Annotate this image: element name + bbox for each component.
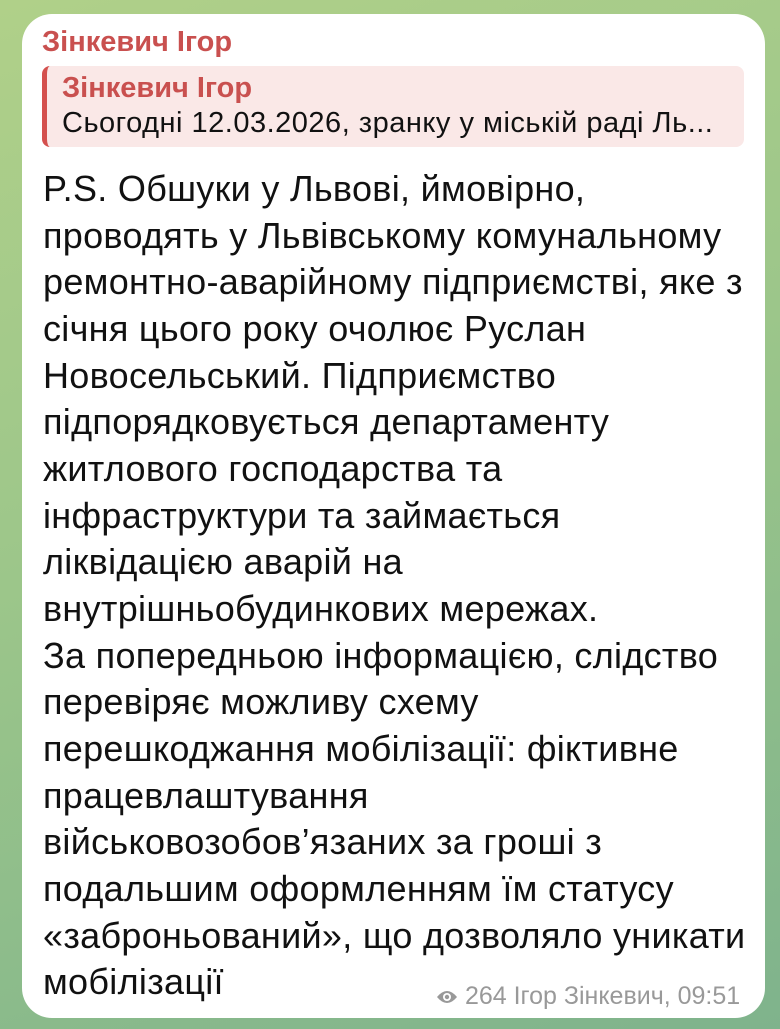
message body text: проводять у Львівському комунальному xyxy=(43,215,721,256)
message body text xyxy=(43,168,745,1002)
message body text: подальшим оформленням їм статусу xyxy=(43,868,674,909)
message body text: житлового господарства та xyxy=(43,448,502,489)
quoted reply xyxy=(42,66,744,147)
message body text: січня цього року очолює Руслан xyxy=(43,308,586,349)
message body text: мобілізації xyxy=(43,961,224,1002)
sender name: Зінкевич Ігор xyxy=(42,26,232,58)
message body text: «заброньований», що дозволяло уникати xyxy=(43,914,745,956)
message body text: перевіряє можливу схему xyxy=(43,681,479,722)
message body text: підпорядковується департаменту xyxy=(43,401,609,442)
message body text: ремонтно-аварійному підприємстві, яке з xyxy=(43,261,743,302)
message body text: За попередньою інформацією, слідство xyxy=(43,635,718,676)
message body text: перешкоджання мобілізації: фіктивне xyxy=(43,728,679,769)
message body text: Новосельський. Підприємство xyxy=(43,355,556,396)
message body text: інфраструктури та займається xyxy=(43,495,560,536)
message body text: внутрішньобудинкових мережах. xyxy=(43,588,598,629)
message body text: P.S. Обшуки у Львові, ймовірно, xyxy=(43,168,585,209)
message body text: ліквідацією аварій на xyxy=(43,541,403,582)
quote author: Зінкевич Ігор xyxy=(62,72,252,104)
message body text: працевлаштування xyxy=(43,775,369,816)
meta: views, author, time: 264 Ігор Зінкевич, 09:51 xyxy=(465,982,740,1010)
message body text: військовозобов’язаних за гроші з xyxy=(43,821,602,862)
quote text: Сьогодні 12.03.2026, зранку у міській раді Ль... xyxy=(62,107,713,139)
